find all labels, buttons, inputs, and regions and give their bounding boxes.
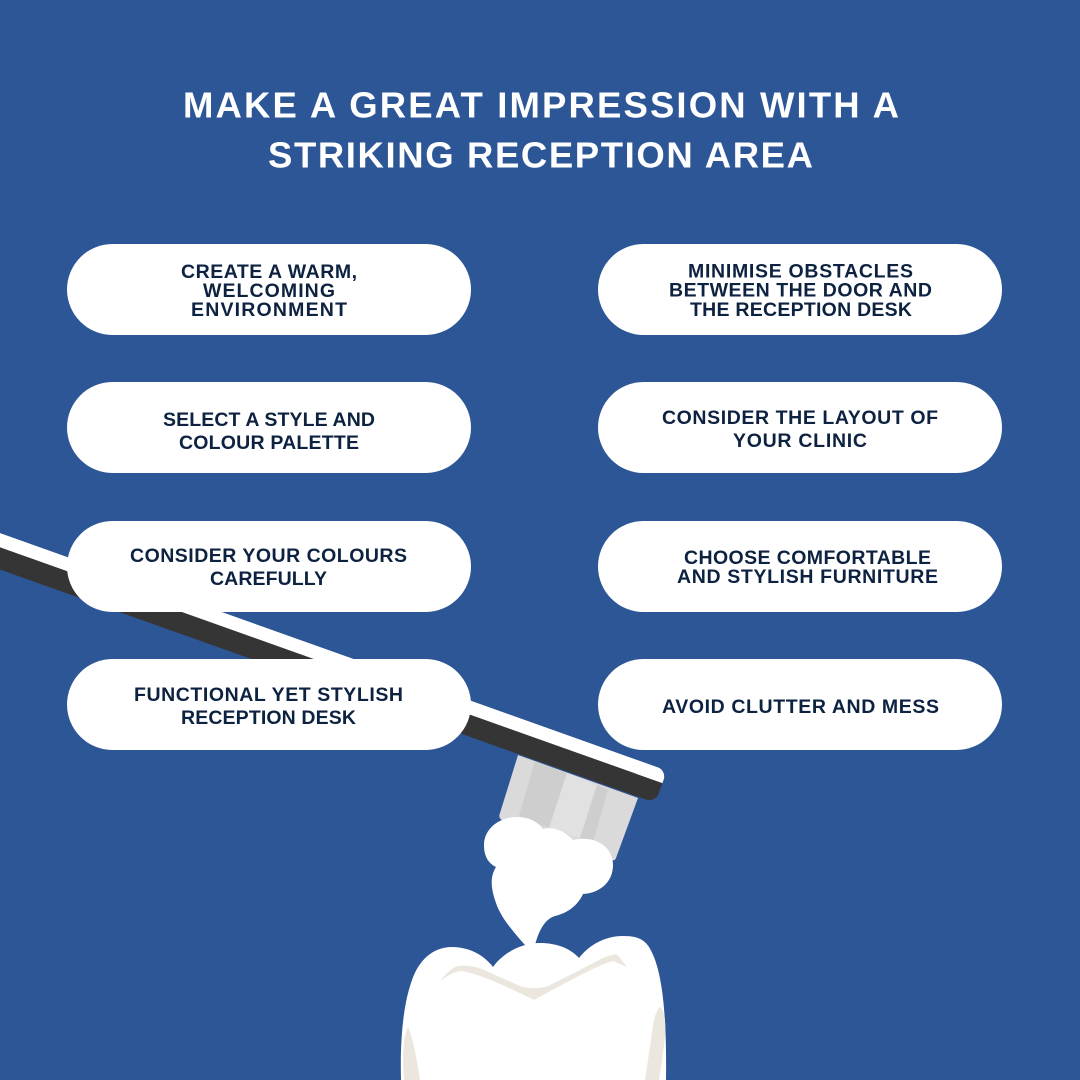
panel: minimise obstacles [598,244,1002,335]
tooth shading [403,955,665,1080]
icon: tooth [401,936,666,1080]
panel: create a warm, welcoming environment: WELCOMING [203,280,335,302]
panel: choose comfortable and stylish furniture [598,521,1002,612]
panel: select a style and colour palette: COLOUR PALETTE [179,432,359,454]
panel: minimise obstacles: THE RECEPTION DESK [690,299,912,321]
panel: minimise obstacles: MINIMISE OBSTACLES [688,260,913,282]
panel: select a style and colour palette: SELECT A STYLE AND [163,409,375,431]
panel: avoid clutter and mess [598,659,1002,750]
icon: toothpaste foam [484,817,613,945]
panel: consider your colours carefully [67,521,471,612]
panel: create a warm, welcoming environment [67,244,471,335]
title [183,84,899,176]
panel: functional yet stylish reception desk [67,659,471,750]
title: STRIKING RECEPTION AREA [268,134,813,176]
panel: create a warm, welcoming environment: CREATE A WARM, [181,261,357,283]
panel: consider your colours carefully: CAREFULLY [210,568,327,590]
panel: functional yet stylish reception desk: FUNCTIONAL YET STYLISH [134,684,403,706]
panel: choose comfortable and stylish furniture: AND STYLISH FURNITURE [677,566,938,588]
icon: toothbrush [0,513,667,860]
panel: choose comfortable and stylish furniture: CHOOSE COMFORTABLE [684,547,931,569]
toothbrush bristles [499,755,638,860]
panel: functional yet stylish reception desk: RECEPTION DESK [181,707,356,729]
panel: consider your colours carefully: CONSIDER YOUR COLOURS [130,545,407,567]
panel: consider the layout of your clinic: YOUR CLINIC [733,430,867,452]
panel: consider the layout of your clinic [598,382,1002,473]
panel: create a warm, welcoming environment: ENVIRONMENT [191,299,347,321]
panel: minimise obstacles: BETWEEN THE DOOR AND [669,280,932,302]
panel: select a style and colour palette [67,382,471,473]
panel: avoid clutter and mess: AVOID CLUTTER AND MESS [662,696,939,718]
toothbrush handle [0,513,667,803]
title: MAKE A GREAT IMPRESSION WITH A [183,84,899,126]
panel: consider the layout of your clinic: CONSIDER THE LAYOUT OF [662,407,938,429]
